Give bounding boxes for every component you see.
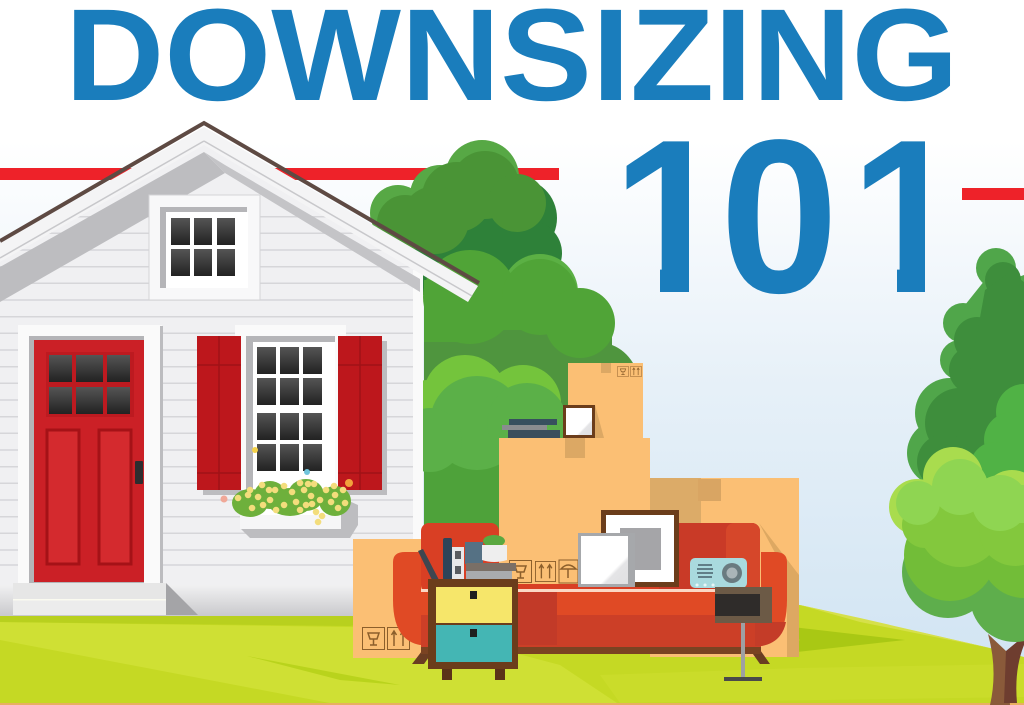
ground: [0, 605, 1024, 705]
right side tree: [889, 248, 1024, 705]
drawer cabinet items: [418, 535, 516, 582]
back right box: [650, 478, 799, 657]
sofa legs: [412, 647, 770, 664]
silver picture frame: [578, 533, 635, 587]
light bush: [398, 355, 567, 472]
flower box: [220, 447, 358, 538]
middle bush: [423, 250, 615, 358]
side table: [715, 587, 772, 681]
sofa seat: [421, 590, 761, 615]
yellow drawer: [436, 587, 512, 623]
red rule right: [962, 188, 1024, 200]
door handle: [135, 461, 143, 484]
teal drawer: [436, 625, 512, 662]
roof edge: [0, 123, 479, 283]
tree trunk: [988, 634, 1024, 705]
moving boxes: [353, 363, 799, 658]
large picture frame: [601, 510, 679, 587]
middle box: [499, 438, 650, 584]
butterflies: [220, 447, 353, 502]
foundation: [0, 585, 353, 616]
gable window: [149, 195, 260, 300]
right shutter: [338, 336, 382, 490]
door steps: [13, 583, 198, 615]
box labels on middle box: [510, 560, 578, 583]
left shutter: [197, 336, 241, 490]
sofa: [393, 523, 787, 664]
sofa arms: [393, 552, 421, 645]
potted plant: [482, 535, 507, 562]
drawer cabinet: [428, 579, 518, 680]
red rule left: [0, 168, 559, 180]
roof fascia: [0, 127, 478, 302]
small books: [502, 419, 560, 438]
title: 101: 101: [612, 93, 968, 339]
house: [0, 123, 479, 616]
tablet: [418, 549, 439, 582]
wall with siding: [0, 130, 423, 586]
left box: [353, 539, 423, 658]
dark green backdrop: [424, 320, 633, 540]
radio: [690, 558, 747, 588]
top bush: [370, 140, 562, 295]
top box: [568, 363, 643, 438]
small picture frame: [563, 405, 604, 438]
front door: [18, 325, 163, 585]
background trees behind house: [370, 140, 633, 540]
main window with shutters: [197, 325, 387, 516]
